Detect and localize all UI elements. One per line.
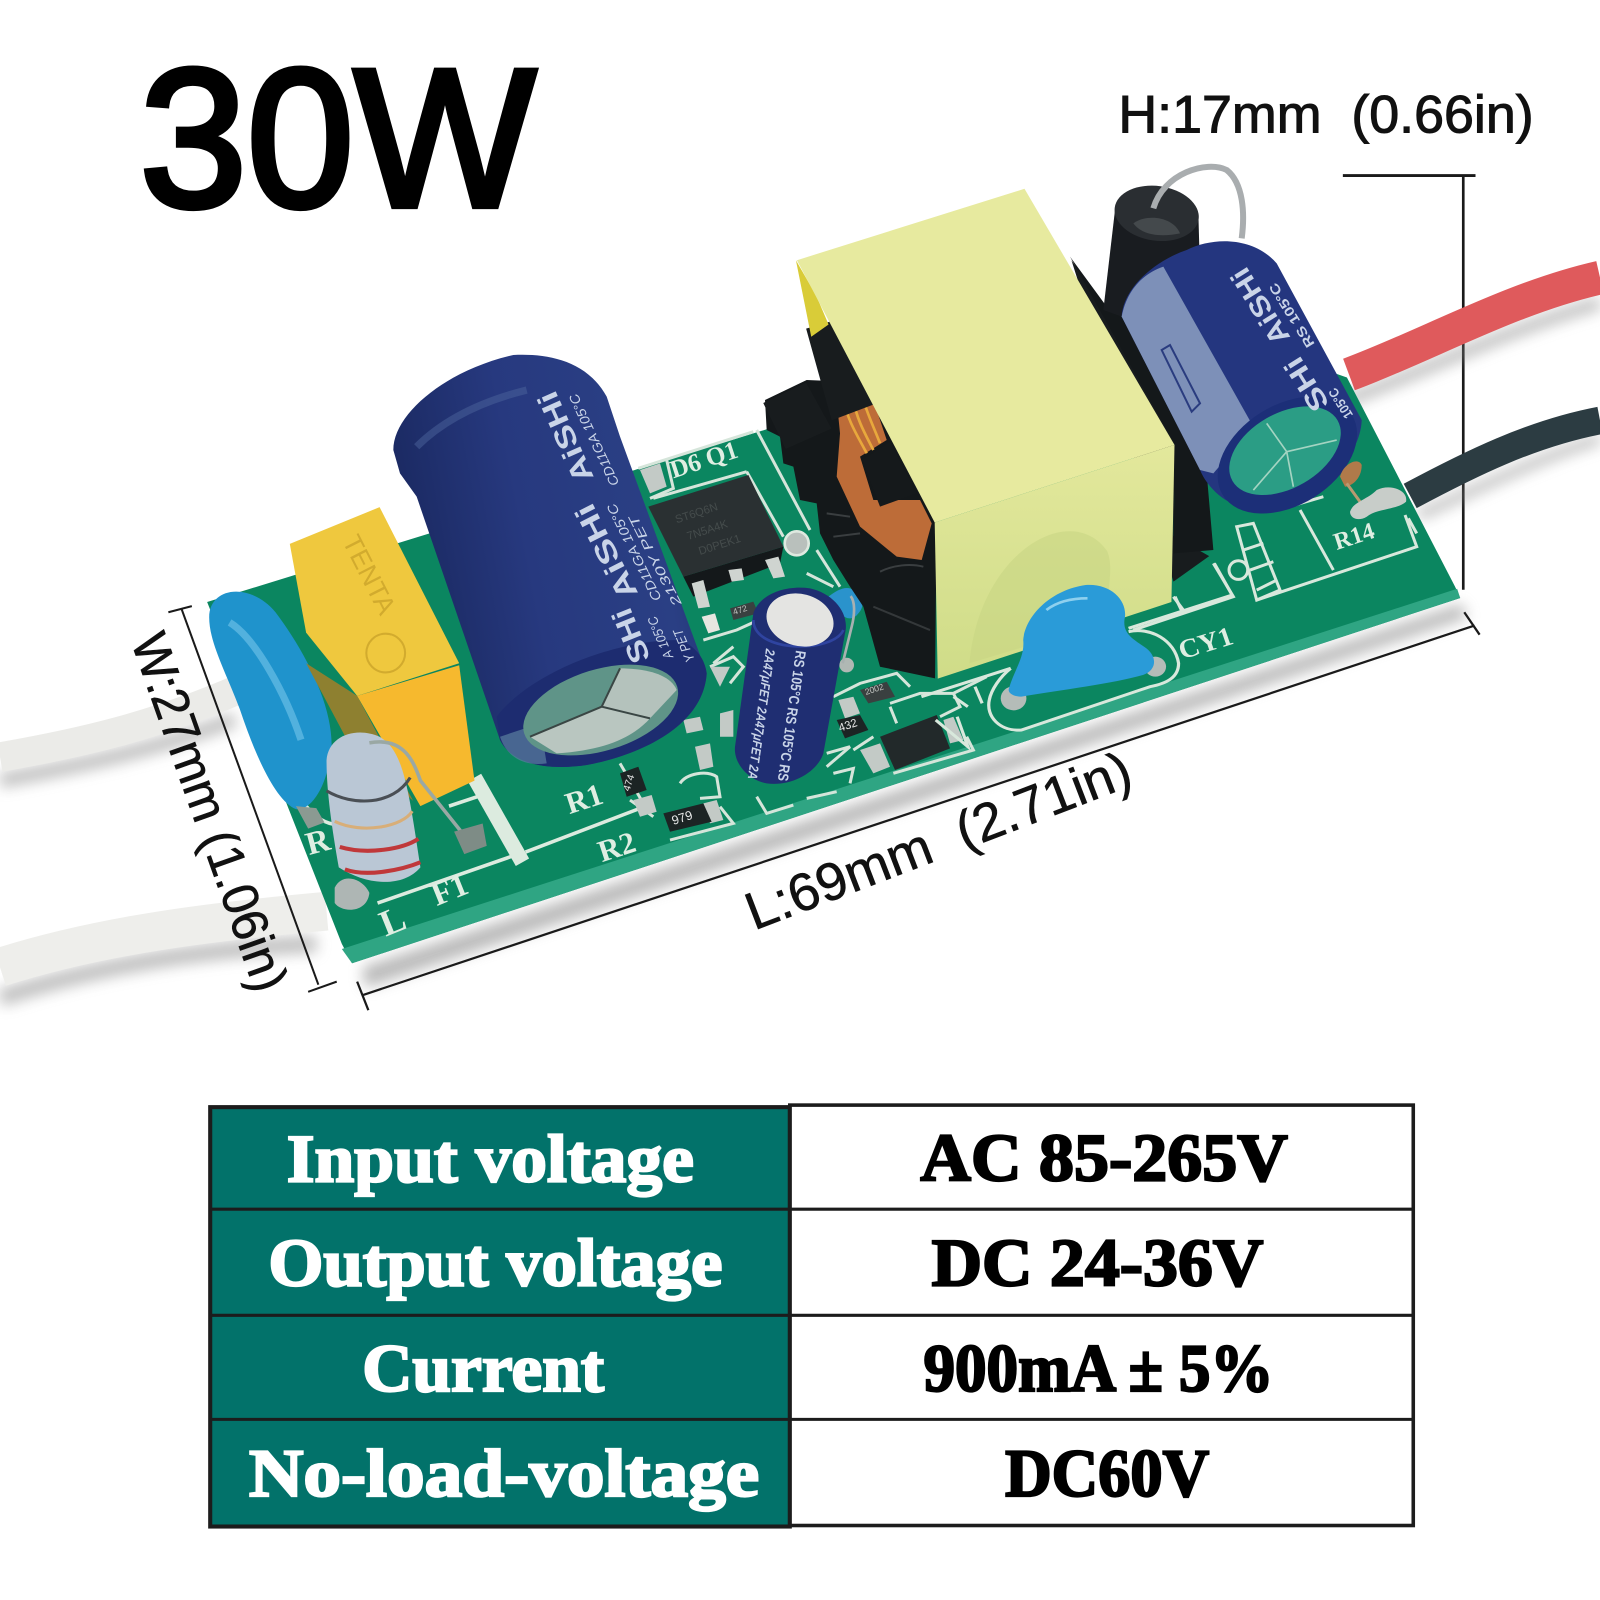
- transformer tape: [796, 189, 1174, 679]
- SMD resistors: 2002: [864, 681, 885, 697]
- silk screen lines: [306, 778, 638, 903]
- solder pads: [633, 463, 963, 823]
- product photo: LED driver circuit board: [0, 167, 1600, 998]
- right side PCB details: AiSHi: [1224, 262, 1296, 351]
- table label column: [211, 1107, 790, 1527]
- specification table: [210, 1105, 1414, 1527]
- small electrolytic capacitor middle: RS 105°C RS 105°C RS: [774, 649, 808, 782]
- R14 label: R14: [1331, 518, 1378, 556]
- SMD resistors: [620, 602, 895, 832]
- right side PCB details: RS 105°C: [1266, 280, 1318, 350]
- wire: red: [1349, 278, 1600, 374]
- right side PCB details: [1070, 167, 1417, 630]
- transformer bobbin and winding: [765, 380, 937, 678]
- row: current: [362, 1331, 1273, 1406]
- SMD resistors: 472: [732, 603, 749, 617]
- transformer black upper parts: [763, 260, 1209, 582]
- row: no-load voltage: [249, 1436, 1209, 1511]
- large electrolytic capacitor: CD11GA 105°C: [566, 391, 622, 488]
- wire: black: [1410, 420, 1600, 496]
- large electrolytic capacitor: CD11GA 105°C: [604, 501, 664, 604]
- right side PCB details: SHi: [1278, 351, 1335, 417]
- CY1 disc capacitor area: [921, 563, 1237, 747]
- board shadow: [362, 604, 1467, 988]
- diode: [880, 715, 950, 770]
- silk labels left: L: [373, 897, 411, 944]
- wire shadows: [0, 303, 1600, 998]
- D6 Q1 label: D6 Q1: [667, 436, 741, 484]
- row: output voltage: DC 24-36V: [932, 1226, 1263, 1301]
- PCB edge: [342, 589, 1460, 963]
- MOSFET: ST6Q6N: [674, 501, 720, 526]
- large electrolytic capacitor: 2130Y PET: [626, 511, 685, 610]
- large electrolytic capacitor: A 105°C: [645, 614, 676, 662]
- brown disc and solder: [1340, 461, 1362, 487]
- table grid: [210, 1105, 1414, 1527]
- length dimension bracket: [357, 612, 1480, 1010]
- large electrolytic capacitor: AiSHi: [569, 498, 645, 605]
- MOSFET: [648, 475, 785, 633]
- silk traces right: [1133, 497, 1417, 630]
- width dimension label: W:27mm (1.06in): [120, 625, 299, 998]
- row: output voltage: Output voltage: [268, 1226, 722, 1301]
- large electrolytic capacitor: AiSHi: [532, 386, 600, 488]
- right side PCB details: 105°C: [1325, 385, 1356, 421]
- wire loop: [1153, 167, 1243, 238]
- PCB board: [207, 306, 1460, 963]
- silk labels left: R1: [561, 777, 607, 821]
- row: input voltage: [287, 1121, 1288, 1197]
- black cylinder: [1103, 180, 1202, 317]
- silk traces: [620, 430, 987, 840]
- SMD resistors: 474: [622, 773, 637, 793]
- length dimension label: L:69mm (2.71in): [737, 740, 1139, 942]
- row: output voltage: [268, 1226, 1263, 1301]
- yellow capacitor box: [290, 507, 474, 806]
- wire: white lower: [0, 911, 327, 967]
- small disc capacitor with lead: [828, 588, 862, 663]
- yellow capacitor box: TENTA: [336, 530, 402, 620]
- PCB centre details: [620, 430, 987, 840]
- small electrolytic capacitor middle: [735, 586, 846, 784]
- row: input voltage: AC 85-265V: [920, 1121, 1288, 1196]
- large electrolytic capacitor: Y PET: [670, 626, 698, 665]
- fuse resistor: [327, 732, 487, 910]
- MOSFET: 7N5A4K: [686, 518, 730, 543]
- row: no-load voltage: No-load-voltage: [249, 1436, 759, 1511]
- large electrolytic capacitor: SHi: [606, 603, 657, 668]
- silk labels left: R2: [594, 825, 640, 869]
- MOSFET: D0PEK1: [697, 533, 742, 558]
- width dimension bracket: [168, 606, 337, 992]
- black area right of transformer: [1070, 257, 1213, 553]
- silk labels left: F1: [426, 867, 473, 914]
- capacitor body: [1122, 241, 1362, 507]
- title: 30W: 30W: [140, 28, 536, 248]
- height dimension bracket: [1343, 176, 1476, 590]
- row: no-load voltage: DC60V: [1005, 1436, 1209, 1511]
- wire: white upper: [0, 689, 240, 757]
- row: current: Current: [362, 1331, 605, 1406]
- silk labels left: [302, 777, 640, 944]
- SMD resistors: 432: [837, 717, 859, 735]
- small electrolytic capacitor middle: 2A47μFET 2A47μFET 2A: [745, 647, 778, 780]
- large electrolytic capacitor: [393, 355, 707, 772]
- silk labels left: R: [302, 822, 334, 863]
- row: input voltage: Input voltage: [287, 1122, 694, 1197]
- SMD resistors: 979: [670, 808, 694, 828]
- CY1 disc capacitor area: CY1: [1174, 620, 1237, 665]
- varistor: blue disc: [209, 592, 332, 829]
- row: current: 900mA ± 5%: [923, 1331, 1273, 1406]
- height dimension label: H:17mm (0.66in): [1118, 86, 1534, 145]
